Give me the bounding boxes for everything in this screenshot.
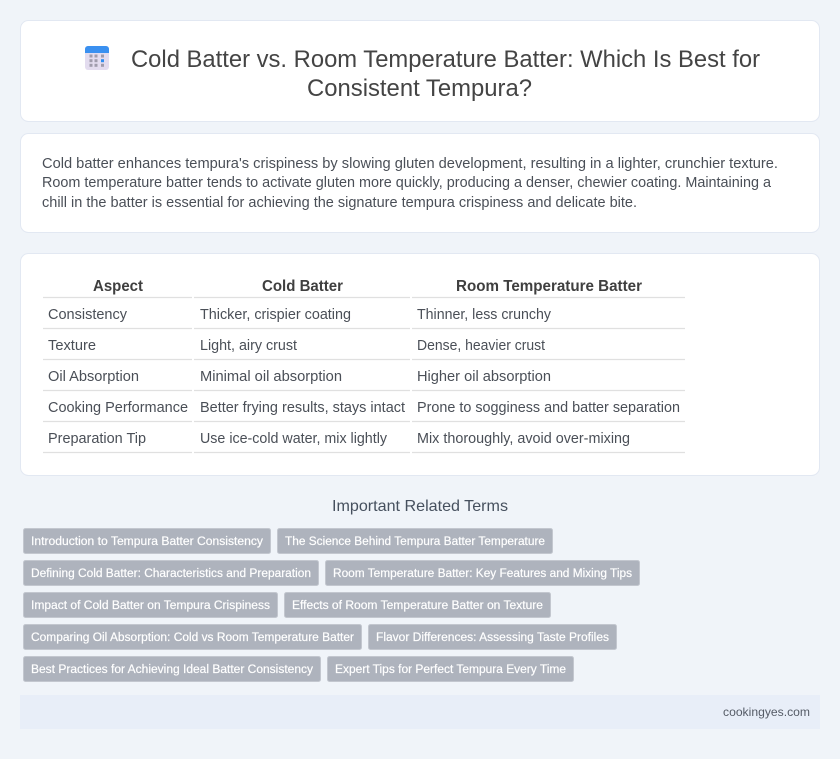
tag [326, 560, 640, 586]
text block: summary: Room temperature batter tends to activate gluten more quickly, producing a denser, chewier coating. Maintaining a [42, 175, 771, 191]
row: oil absorption [48, 369, 551, 385]
title: Consistent Tempura? [307, 75, 532, 102]
panel: summary paragraph [20, 134, 820, 232]
row: oil absorption: Higher oil absorption [417, 369, 551, 385]
row: consistency: Thicker, crispier coating [200, 307, 351, 323]
tag: Effects of Room Temperature Batter on Texture [292, 598, 543, 612]
tag [284, 592, 550, 618]
tag: Room Temperature Batter: Key Features and Mixing Tips [333, 566, 632, 580]
title: Cold Batter vs. Room Temperature Batter: Which Is Best for [131, 46, 760, 73]
tag: Comparing Oil Absorption: Cold vs Room Temperature Batter [31, 630, 354, 644]
row: cooking performance: Better frying results, stays intact [200, 400, 405, 416]
row: preparation tip: Mix thoroughly, avoid over-mixing [417, 431, 630, 447]
footer: cookingyes.com [723, 705, 810, 719]
row: texture: Light, airy crust [200, 338, 297, 354]
tag [328, 656, 574, 682]
row: oil absorption: Minimal oil absorption [200, 369, 342, 385]
footer [20, 695, 820, 729]
tag: Expert Tips for Perfect Tempura Every Time [335, 662, 566, 676]
heading: related terms: Important Related Terms [332, 498, 508, 515]
row: cooking performance: Prone to sogginess and batter separation [417, 400, 680, 416]
text block: summary: chill in the batter is essential for achieving the signature tempura crispiness and delicate bite. [42, 195, 637, 211]
table rules [43, 298, 685, 452]
row: preparation tip [48, 431, 630, 447]
text block: summary: Cold batter enhances tempura's crispiness by slowing gluten development, resulting in a lighter, crunchier texture. [42, 156, 778, 172]
tag [24, 656, 320, 682]
panel: header [20, 20, 820, 122]
row: texture: Dense, heavier crust [417, 338, 545, 354]
table header [93, 278, 642, 295]
tag: Best Practices for Achieving Ideal Batter Consistency [31, 662, 314, 676]
panel: comparison table [20, 254, 820, 476]
tag [24, 560, 318, 586]
tag: Defining Cold Batter: Characteristics and Preparation [31, 566, 311, 580]
tag [368, 624, 616, 650]
tag: The Science Behind Tempura Batter Temperature [285, 534, 545, 548]
table header: Room Temperature Batter [456, 278, 642, 295]
tag [24, 592, 278, 618]
row: preparation tip: Use ice-cold water, mix lightly [200, 431, 388, 447]
tag: Impact of Cold Batter on Tempura Crispiness [31, 598, 270, 612]
row: texture: Texture [48, 338, 96, 354]
row: consistency: Thinner, less crunchy [417, 307, 552, 323]
row: consistency [48, 307, 552, 323]
text block: summary [42, 156, 778, 211]
tag [278, 528, 552, 554]
row: preparation tip: Preparation Tip [48, 431, 146, 447]
icon: calendar [85, 46, 109, 70]
tag: Flavor Differences: Assessing Taste Profiles [376, 630, 609, 644]
row: texture [48, 338, 545, 354]
tag [24, 528, 270, 554]
row: cooking performance [48, 400, 680, 416]
table header: Cold Batter [262, 278, 343, 295]
row: oil absorption: Oil Absorption [48, 369, 139, 385]
table header: Aspect [93, 278, 144, 295]
related term tags [24, 528, 640, 682]
row: cooking performance: Cooking Performance [48, 400, 188, 416]
title [131, 46, 760, 102]
tag [24, 624, 362, 650]
row: consistency: Consistency [48, 307, 128, 323]
tag: Introduction to Tempura Batter Consistency [31, 534, 264, 548]
